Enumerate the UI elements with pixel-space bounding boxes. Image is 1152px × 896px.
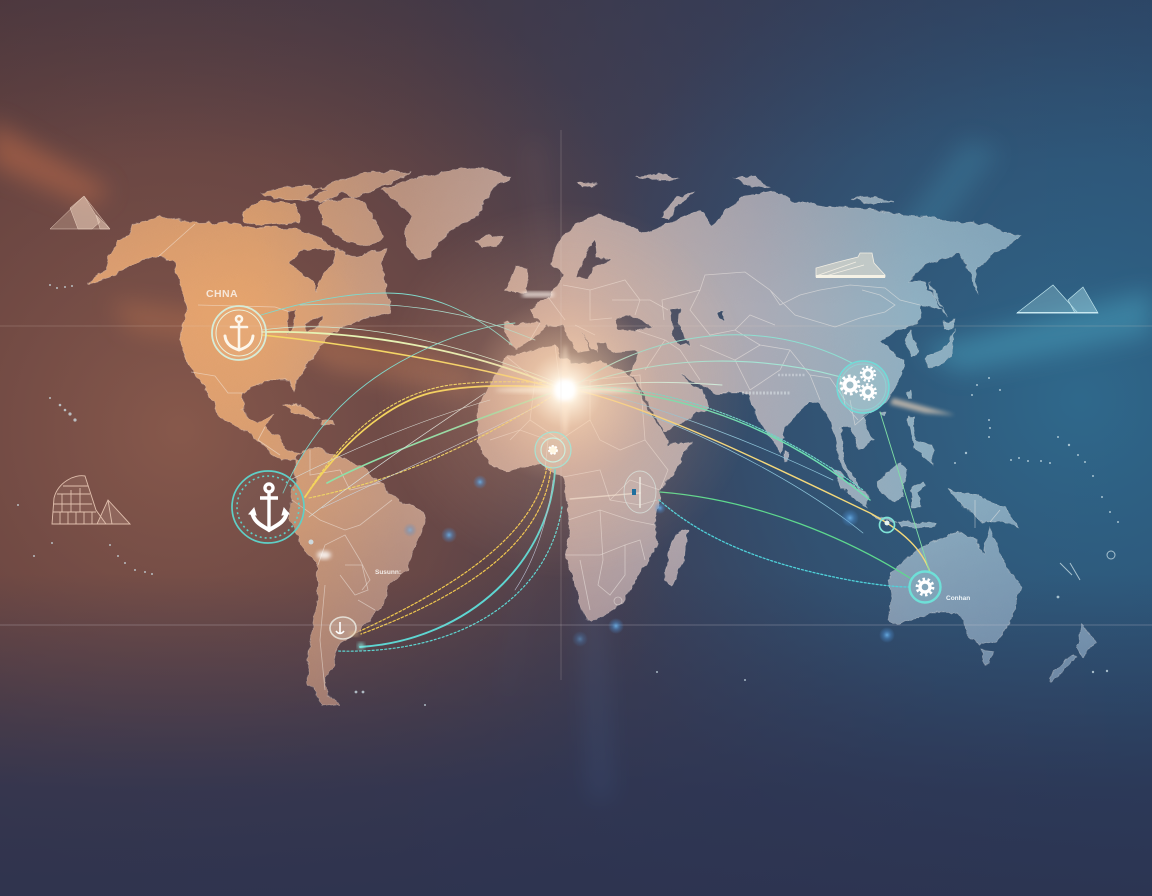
icon: mountain peaks, top left: [50, 196, 110, 229]
icon: colosseum and pyramid: [52, 476, 130, 524]
icon: anchor: [225, 316, 253, 350]
icon: gear large: [841, 376, 859, 394]
world map landmass: [86, 168, 1097, 707]
label: North America: CHNA: [206, 288, 238, 300]
label: Brazil: Susunn:: [375, 569, 401, 576]
streak near Taiwan: [890, 398, 955, 415]
marker: gear, Australia: [910, 572, 940, 602]
country borders: [158, 224, 1000, 690]
central light burst: [375, 200, 755, 580]
routes: Africa to southern South America: [337, 467, 562, 651]
pacific island dots: [17, 284, 1119, 706]
lens crosshair lines: [0, 130, 1152, 680]
routes: hub to Asia and Australia: [570, 335, 930, 587]
icon: pyramids, right: [1017, 285, 1098, 314]
city light clusters: [308, 292, 806, 559]
icon: gear: [917, 579, 933, 595]
marker: East Africa node: [624, 471, 656, 513]
marker: anchor, South America: [232, 471, 304, 543]
light rays behind the map: [0, 120, 1152, 800]
marker: anchor, North America: [212, 306, 266, 360]
shipping routes: [261, 293, 930, 651]
icon: gear bottom: [860, 384, 876, 400]
blue lens flares: [403, 475, 895, 647]
marker: small anchor, Argentina: [330, 617, 364, 649]
icon: great wall fort: [816, 253, 885, 278]
routes: North America to hub: [261, 293, 555, 388]
marker: gears, China: [837, 361, 889, 413]
label: Australia: Conhan: [946, 595, 970, 602]
icon: gear top: [861, 367, 875, 381]
marker: West Africa node: [535, 432, 571, 468]
marker: small ring, Java: [880, 518, 894, 532]
icon: large anchor: [249, 484, 289, 530]
routes: South America to hub: [283, 323, 555, 517]
